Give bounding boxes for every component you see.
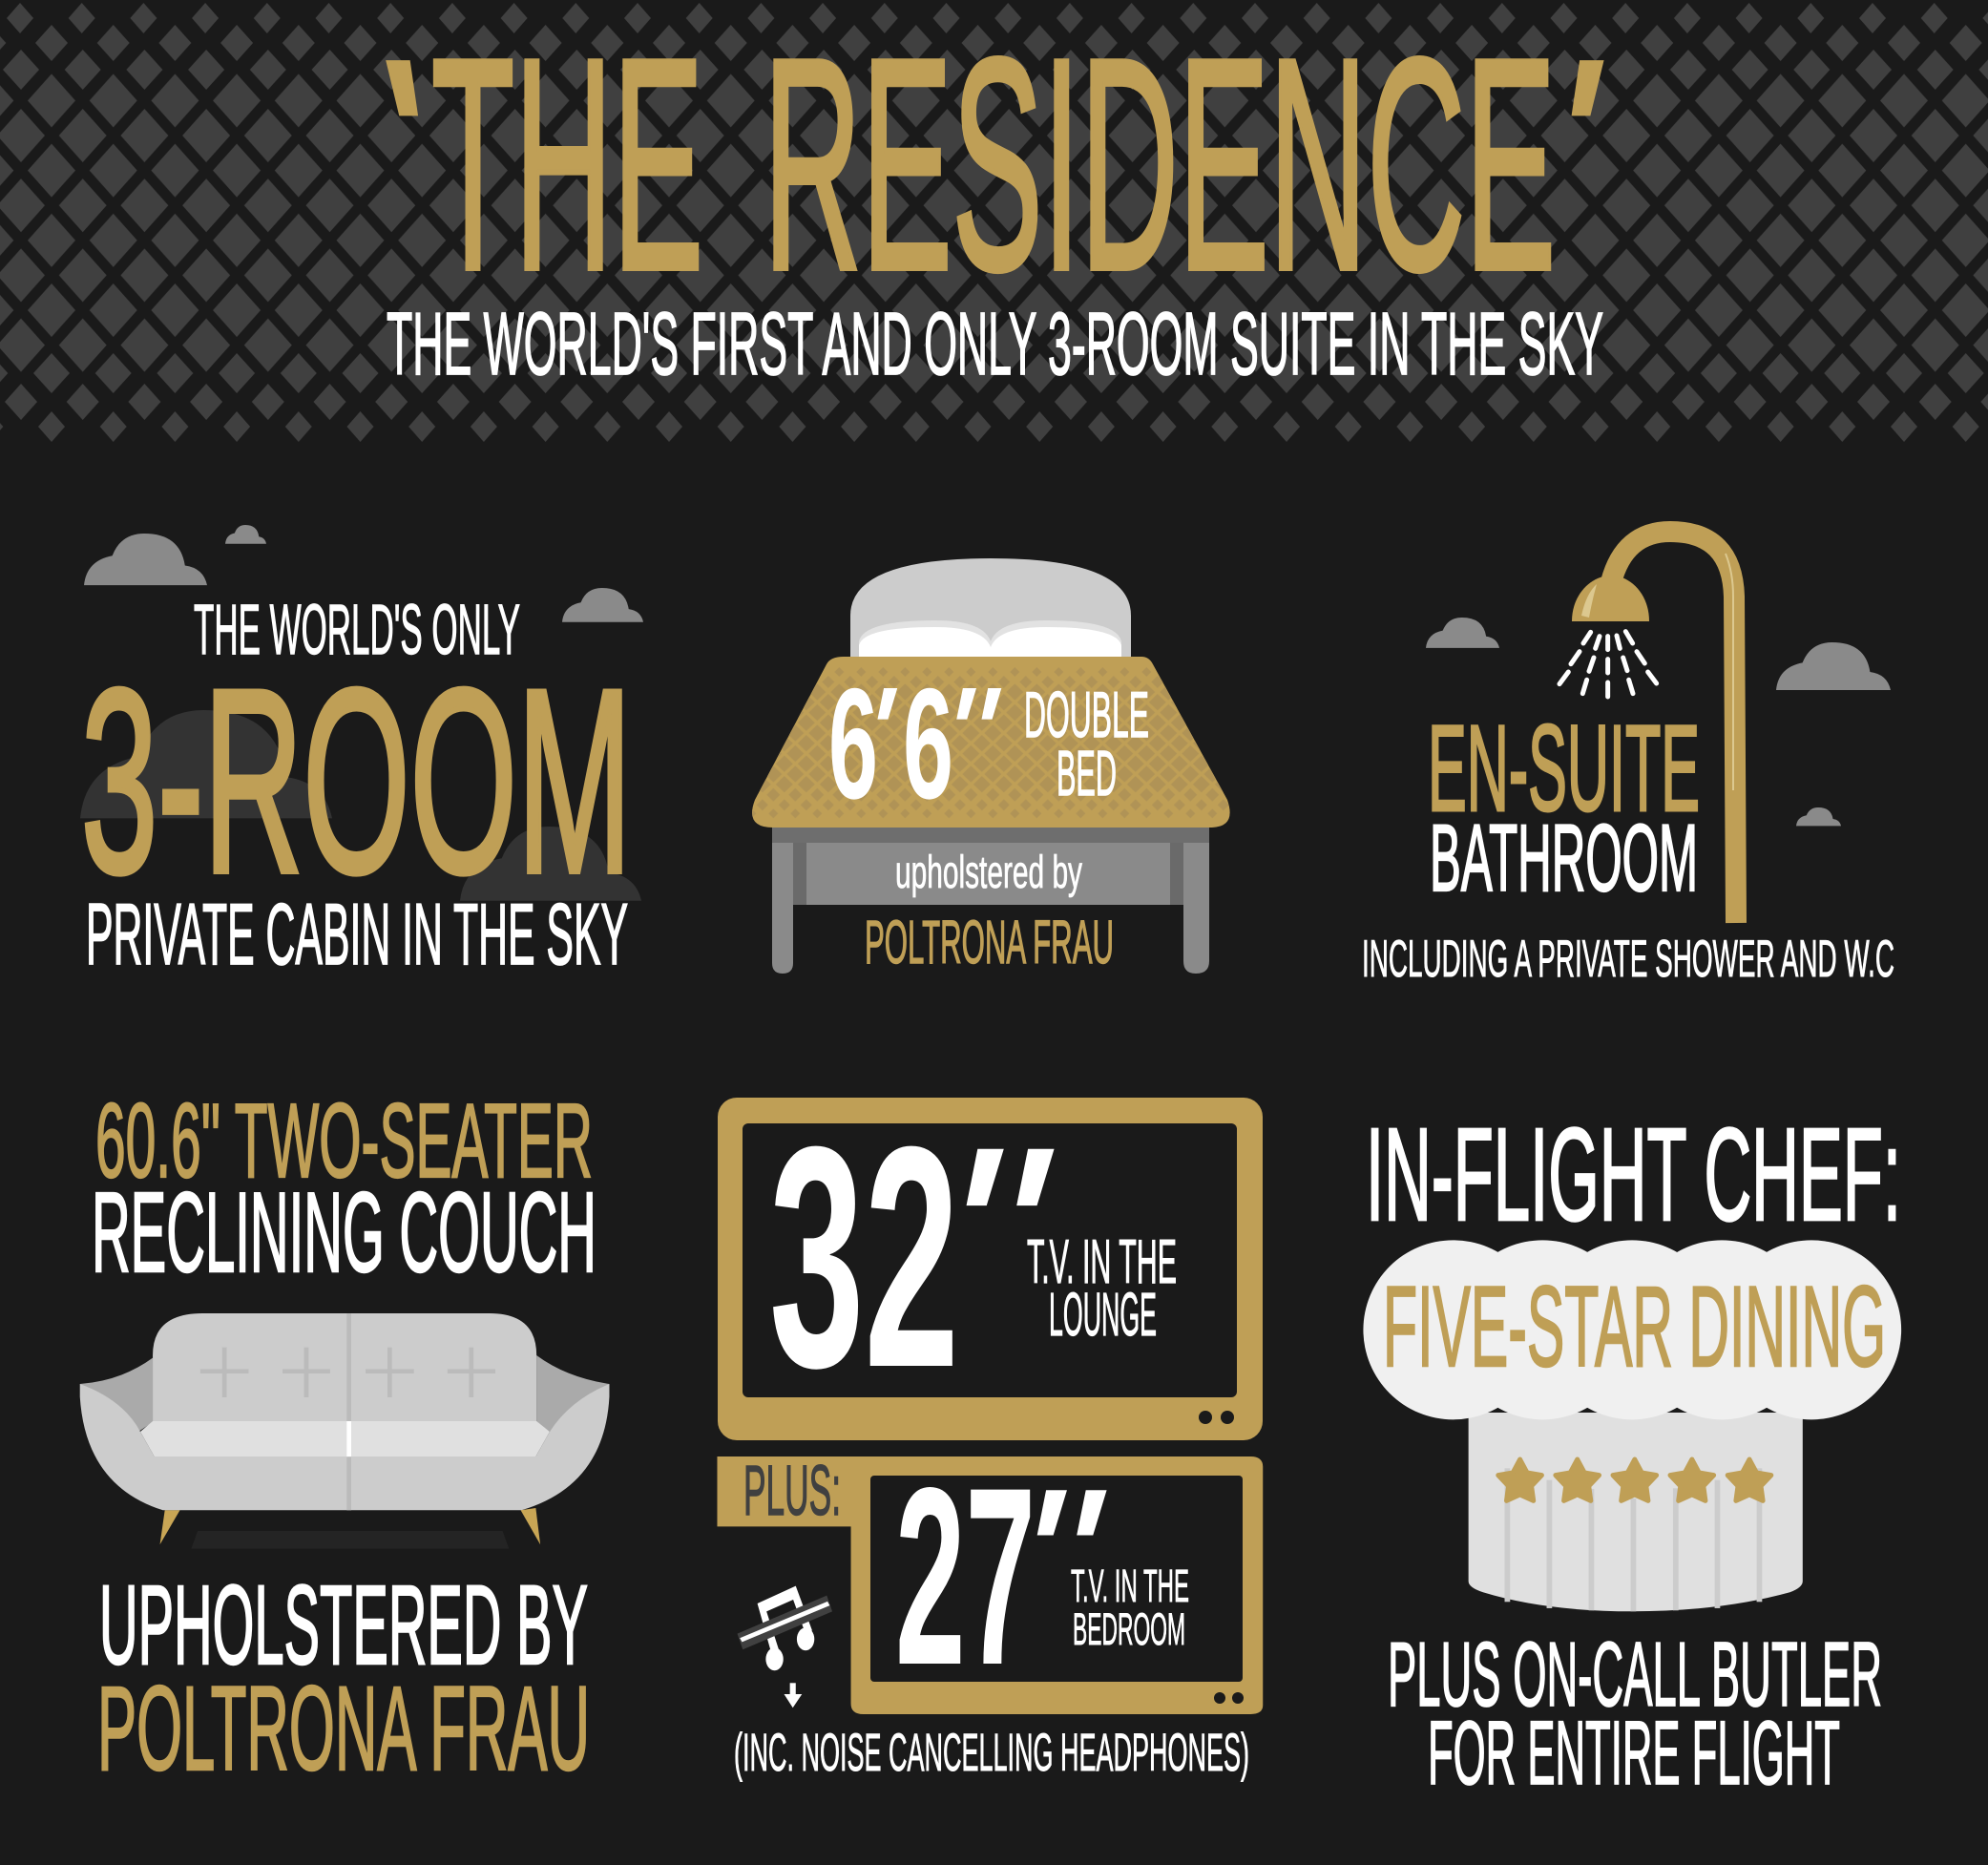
shower head	[1572, 576, 1649, 621]
panel: bed: POLTRONA FRAU	[865, 908, 1114, 976]
text: 6'6": '	[846, 660, 911, 815]
icon: muted music note	[738, 1586, 832, 1670]
panel: bed: DOUBLE	[1024, 679, 1149, 751]
tv 32 inch buttons	[1199, 1411, 1234, 1424]
panel: bed	[744, 558, 1241, 976]
cloud small	[225, 525, 266, 544]
cloud small right	[1796, 807, 1841, 826]
left leg	[772, 843, 793, 974]
panel: bed: BED	[1057, 738, 1117, 809]
pipe highlight	[1726, 554, 1733, 790]
title: '	[1524, 7, 1625, 284]
text: 6'6": 6	[903, 656, 953, 831]
frame panel	[806, 843, 1170, 905]
text: UPHOLSTERED BY	[99, 1562, 588, 1688]
cloud left	[1426, 618, 1499, 648]
panel: couch	[80, 1082, 609, 1795]
panel: bathroom	[1362, 532, 1894, 988]
cloud right	[1776, 642, 1891, 690]
text: 32 inch: 32	[769, 1080, 959, 1433]
icon: chef hat	[1363, 1240, 1901, 1611]
dark cloud lower	[460, 827, 641, 901]
dark cloud behind heading	[80, 710, 332, 818]
panel: bathroom: BATHROOM	[1430, 805, 1698, 911]
tv 32 inch frame	[718, 1098, 1263, 1440]
panel: bathroom: EN-SUITE	[1428, 701, 1700, 837]
water drops	[1559, 632, 1657, 697]
text: 6'6": 6	[828, 656, 878, 831]
mattress	[744, 654, 1241, 830]
frame rail	[793, 843, 1183, 905]
diamond pattern header band	[0, 3, 1988, 442]
icon: down arrow	[785, 1683, 802, 1708]
panel: televisions: BEDROOM	[1073, 1603, 1185, 1654]
right leg	[1183, 843, 1209, 974]
panel: televisions: LOUNGE	[1049, 1280, 1157, 1349]
bed frame band	[772, 821, 1209, 843]
title: THE	[431, 0, 703, 332]
text: 27 inch: "	[991, 1447, 1126, 1675]
headboard	[850, 558, 1131, 657]
cloud medium	[562, 588, 643, 622]
pillows	[859, 620, 1121, 657]
icon: five stars	[1498, 1459, 1771, 1500]
panel: televisions: T.V. IN THE	[1027, 1226, 1177, 1296]
panel: 3-room cabin	[80, 525, 643, 983]
panel: televisions: T.V. IN THE	[1071, 1561, 1189, 1612]
title: '	[364, 7, 465, 284]
panel: televisions	[717, 1080, 1263, 1782]
tv 27 inch screen	[870, 1476, 1243, 1682]
tv 32 inch screen	[743, 1123, 1237, 1397]
panel: couch: POLTRONA FRAU	[97, 1663, 590, 1795]
text: 6'6": "	[926, 660, 1014, 815]
panel: chef	[1363, 1101, 1901, 1804]
tv 27 inch buttons	[1214, 1692, 1244, 1704]
panel: televisions: PLUS:	[743, 1451, 841, 1530]
icon: couch	[80, 1313, 609, 1549]
text: 3-room: 3-ROOM	[81, 636, 632, 928]
head highlight	[1581, 584, 1597, 618]
cloud large	[84, 534, 207, 585]
text: RECLINING COUCH	[92, 1169, 596, 1296]
text: PRIVATE CABIN IN THE SKY	[86, 887, 628, 983]
panel: 3-room cabin: THE WORLD'S ONLY	[194, 590, 520, 669]
text: 6'6"	[828, 656, 1014, 831]
text: 32 inch: "	[909, 1095, 1079, 1382]
text: upholstered by: upholstered by	[895, 848, 1082, 898]
text: 27 inch: 27	[895, 1435, 1036, 1718]
shower pipe	[1611, 532, 1736, 923]
text: (INC. NOISE CANCELLING HEADPHONES)	[734, 1722, 1249, 1782]
text: two-seater: 60.6" TWO-SEATER	[95, 1082, 593, 1200]
tv 27 inch frame with plus tab	[717, 1456, 1263, 1714]
title	[364, 0, 1625, 332]
